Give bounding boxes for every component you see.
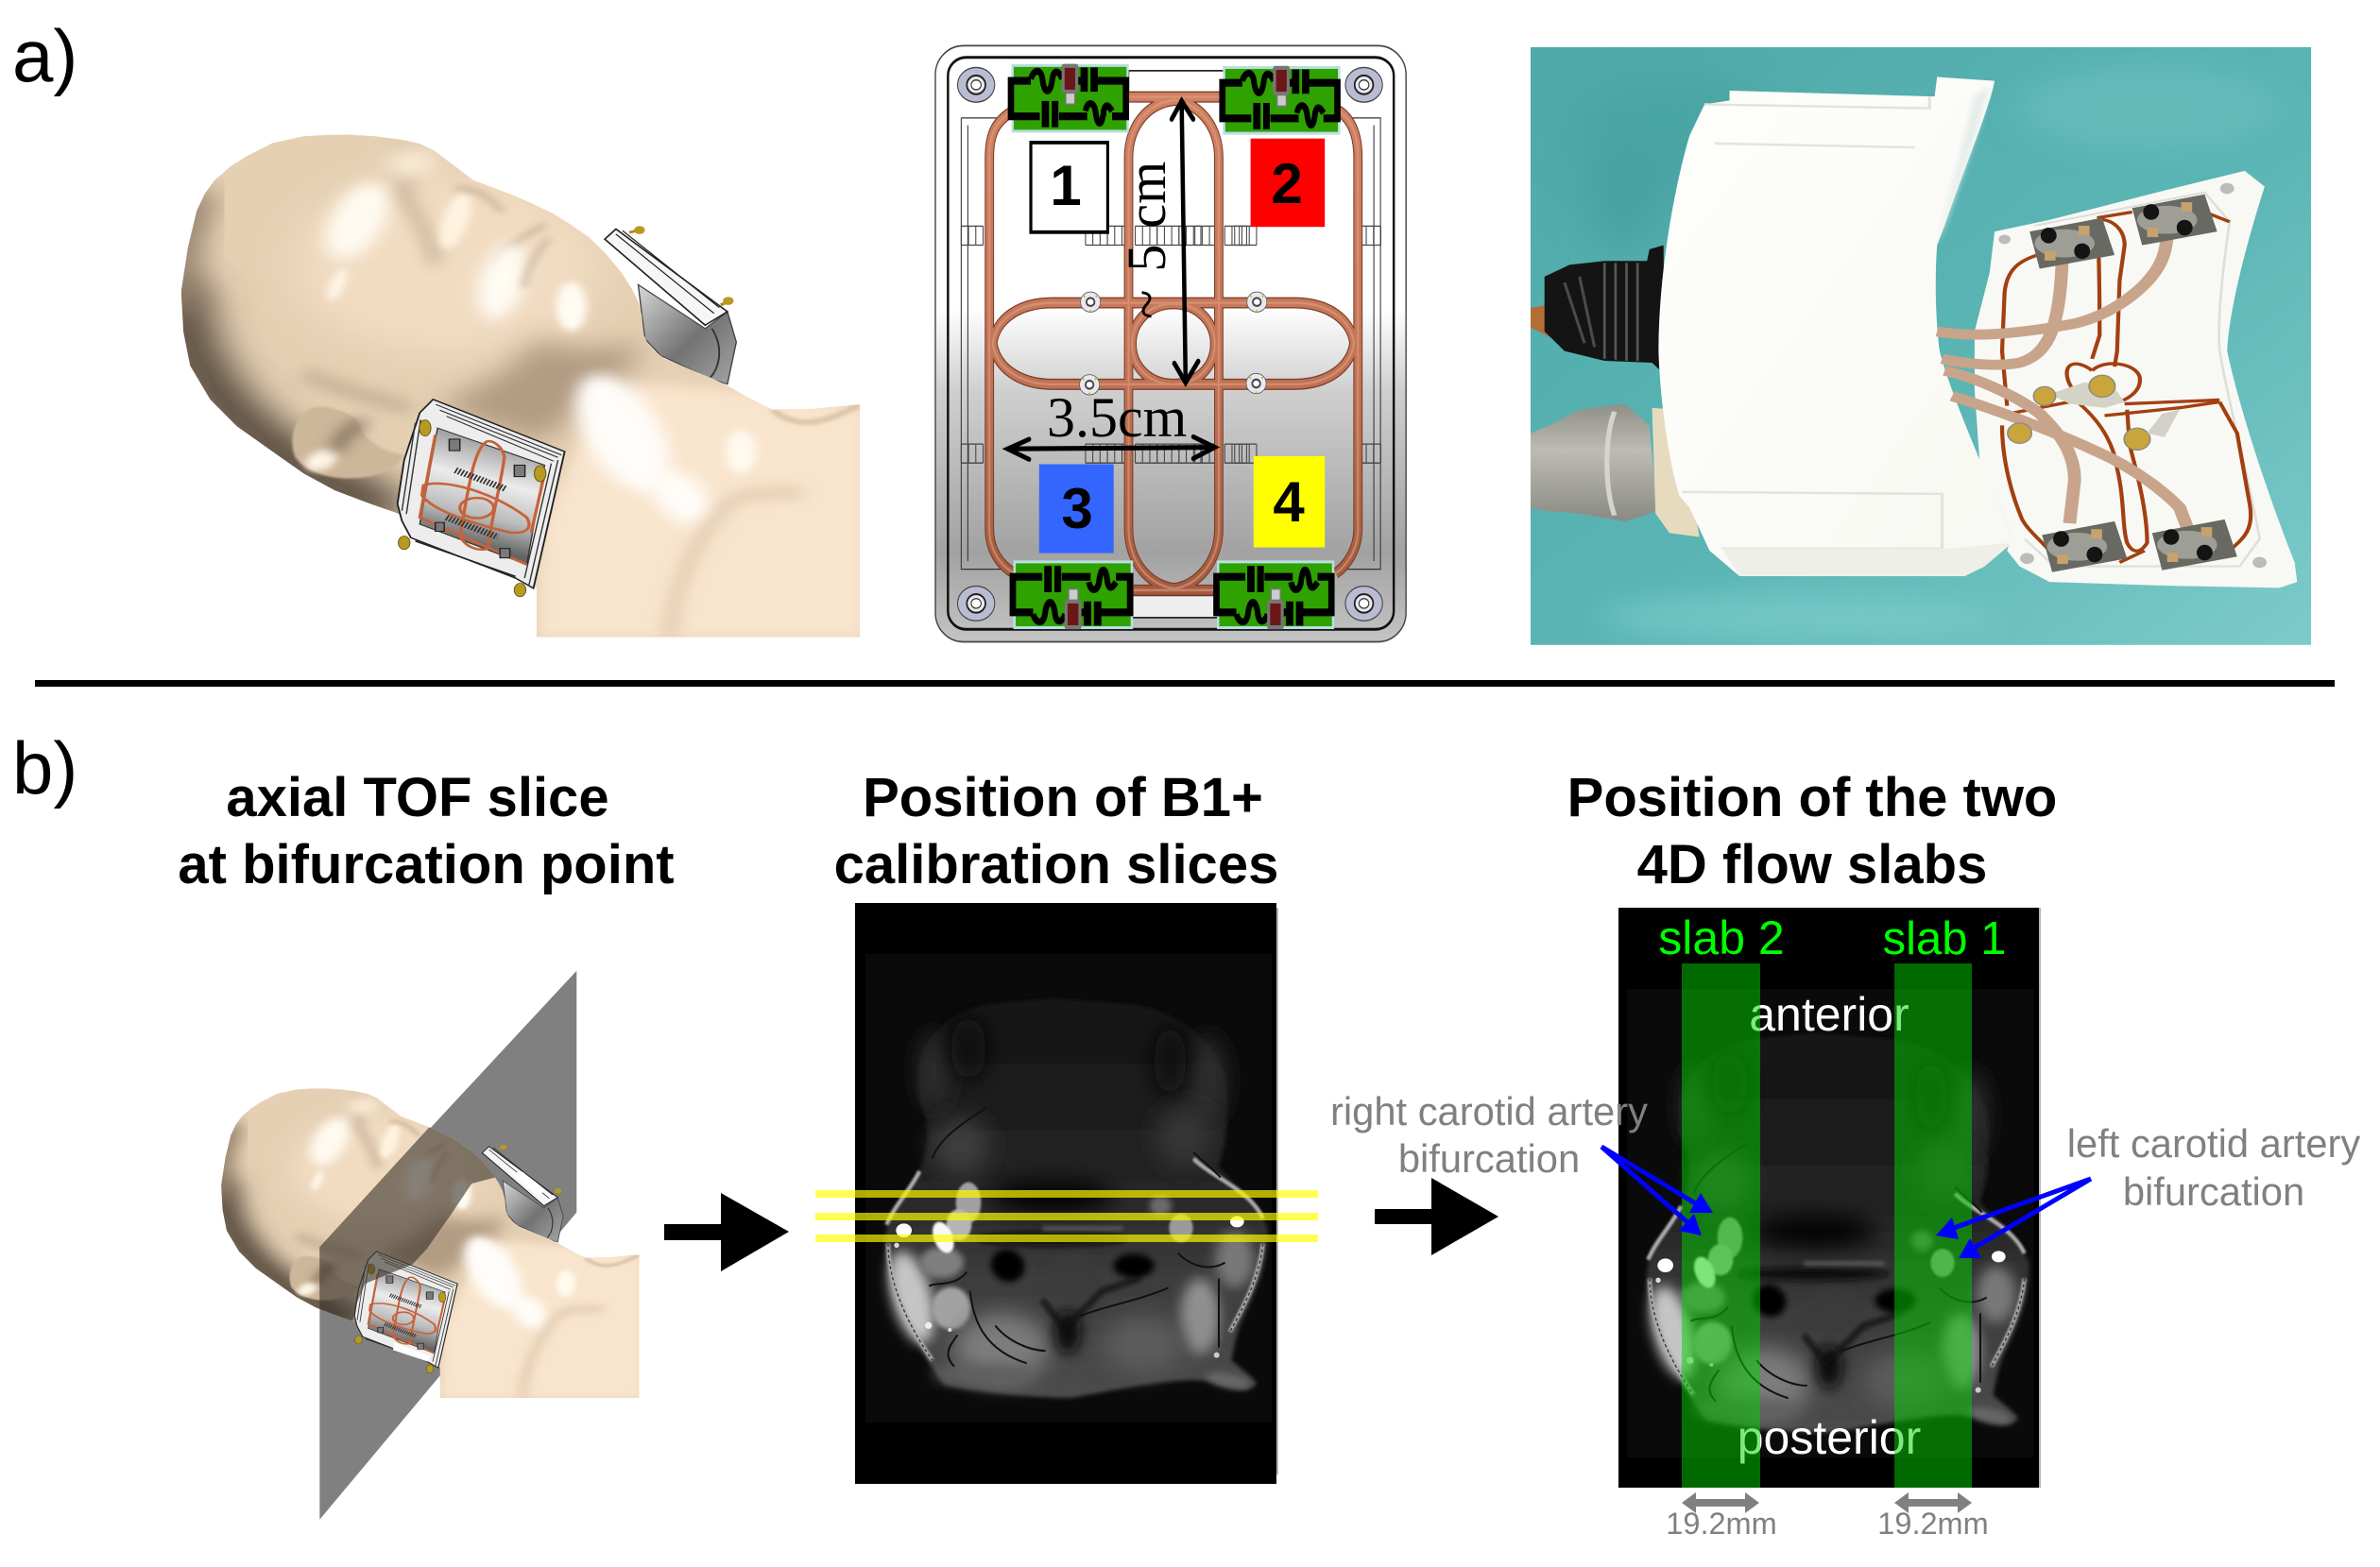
arrow to flow slabs: [1375, 1178, 1498, 1255]
panel label: a): a): [12, 14, 77, 97]
heading: B1+ calibration slices: calibration slices: [834, 834, 1278, 895]
cable connector: black: [1531, 246, 1665, 374]
arrow to calibration slices: [664, 1193, 789, 1271]
copper loops: [989, 97, 1358, 590]
slice plane over head: [319, 1128, 495, 1320]
heading: 4D flow slabs: Position of the two: [1567, 767, 2057, 828]
callout: left carotid artery bifurcation: bifurcation: [2123, 1169, 2304, 1214]
callout: left carotid artery bifurcation: [2067, 1121, 2360, 1214]
slab 2 band: [1682, 963, 1760, 1488]
divider between parts a and b: [35, 680, 2335, 687]
MRI: calibration slices: [815, 903, 1318, 1484]
dimension label: 3.5cm: 3.5cm: [1047, 386, 1187, 449]
coil number 4: 4: [1273, 470, 1305, 534]
dimension: slab 2 width: 19.2mm: [1666, 1507, 1777, 1541]
connector ticks: [961, 226, 1380, 463]
heading: axial TOF slice: [178, 767, 675, 895]
yellow calibration slice lines: [815, 1190, 1318, 1242]
slice plane behind head: [319, 971, 576, 1520]
label: posterior: posterior: [1738, 1411, 1921, 1464]
callout: left carotid artery bifurcation: left carotid artery: [2067, 1121, 2360, 1166]
label: anterior: anterior: [1749, 988, 1909, 1041]
circuit boards: [1011, 64, 1339, 629]
callout: right carotid artery bifurcation: bifurcation: [1398, 1136, 1580, 1181]
heading: B1+ calibration slices: Position of B1+: [863, 767, 1263, 828]
heading: axial TOF slice: axial TOF slice: [226, 767, 609, 828]
small head with coil: [214, 1082, 654, 1414]
corner nuts: [957, 67, 1382, 621]
illustration: head with coil mounted on the neck: [170, 123, 883, 662]
dimension label: 5cm: ~5cm: [1116, 162, 1177, 319]
plane cut-outs on coil: [393, 1342, 431, 1361]
coil number 2: 2: [1271, 152, 1303, 215]
white housing: [1658, 77, 2012, 576]
panel label: b): b): [12, 726, 77, 809]
coloured coil markers: [1031, 139, 1325, 553]
callout: right carotid artery bifurcation: [1330, 1089, 1648, 1181]
open coil plate with wiring: [1937, 171, 2297, 588]
illustration: head with axial slice plane: [214, 971, 654, 1520]
heading: 4D flow slabs: 4D flow slabs: [1637, 834, 1987, 895]
dimension: slab 1 width: 19.2mm: [1877, 1507, 1989, 1541]
heading: axial TOF slice: at bifurcation point: [178, 834, 675, 895]
blue arrows: left carotid: [1936, 1179, 2091, 1258]
coil number 1: 1: [1050, 154, 1082, 217]
heading: B1+ calibration slices: [834, 767, 1278, 895]
coil number 3: 3: [1061, 477, 1093, 540]
label: slab 2: slab 2: [1658, 911, 1785, 964]
MRI: 4D flow slabs: [1618, 908, 2041, 1488]
panel: coil layout diagram: [935, 45, 1406, 641]
dimension arrows: [1007, 101, 1215, 459]
coil frame: [935, 45, 1406, 641]
slab 1 band: [1894, 963, 1972, 1488]
blue arrows: right carotid: [1601, 1147, 1713, 1235]
cable connector: grey: [1531, 404, 1700, 537]
callout: right carotid artery bifurcation: right carotid artery: [1330, 1089, 1648, 1133]
panel: photograph of coil hardware: [1531, 47, 2311, 645]
label: slab 1: slab 1: [1883, 913, 2006, 964]
heading: 4D flow slabs: [1567, 767, 2057, 895]
